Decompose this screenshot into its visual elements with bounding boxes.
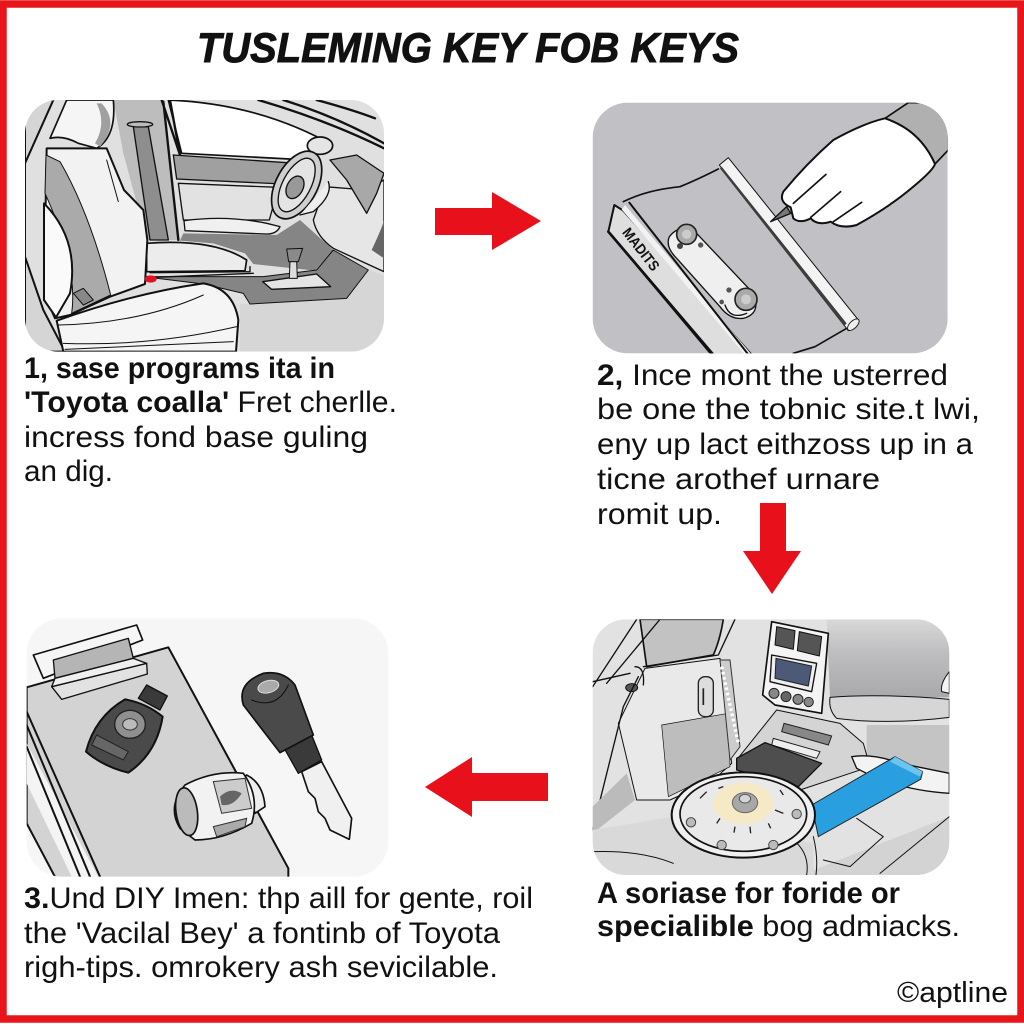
key fob [86, 685, 167, 773]
text: step 3: 3.Und DIY Imen: thp aill for gente, roil [24, 882, 533, 915]
ignition dial [672, 772, 815, 858]
title: TUSLEMING KEY FOB KEYS [197, 24, 739, 71]
door window frame [593, 619, 735, 687]
text: step 2: be one the tobnic site.t lwi, [597, 393, 980, 426]
text: step 4: A soriase for foride or [597, 877, 900, 910]
arrow: step 4 to 3 [425, 757, 548, 817]
window [168, 100, 317, 160]
clip [33, 625, 147, 699]
armrest box [147, 242, 247, 272]
spine text: MADITS [619, 225, 662, 275]
lower right interior [867, 725, 949, 773]
red marker [145, 275, 157, 283]
key plate [668, 224, 757, 319]
headrest [50, 100, 114, 148]
door panel [173, 155, 333, 271]
caption: brand mark: ©aptline [897, 977, 1008, 1009]
sheet edge [623, 169, 847, 353]
text: step 2 [597, 359, 980, 531]
roof lines [258, 100, 384, 148]
center stack [737, 622, 870, 790]
text: step 3 [24, 882, 533, 984]
panel: dashboard with ignition and blue tool [593, 619, 949, 875]
clipboard [27, 647, 288, 880]
lower floor [593, 817, 813, 875]
upper dashboard [827, 619, 949, 697]
steering wheel [270, 136, 334, 220]
center console [143, 250, 368, 304]
blue tool [812, 756, 949, 837]
sleeve [885, 103, 948, 164]
seat back [44, 148, 147, 318]
dashboard [313, 180, 384, 272]
white bar [719, 158, 861, 332]
text: step 1: an dig. [24, 455, 113, 488]
text: step 1: 1, sase programs ita in [24, 352, 335, 385]
panel: car interior with front seat [25, 100, 384, 352]
text: step 3: righ-tips. omrokery ash sevicilable. [24, 951, 498, 984]
book spine [608, 203, 753, 357]
dark module [737, 743, 822, 787]
text: step 4: specialible bog admiacks. [597, 910, 960, 943]
hand [771, 118, 935, 227]
glove box [830, 696, 949, 721]
text: step 4 [597, 877, 960, 943]
text: step 2: romit up. [597, 498, 722, 531]
arrow: step 1 to 2 [435, 192, 541, 250]
panel: key fobs on clipboard [27, 618, 388, 880]
text: step 2: 2, Ince mont the usterred [597, 359, 948, 392]
text: step 1: 'Toyota coalla' Fret cherlle. [24, 386, 397, 419]
floor [240, 270, 384, 352]
panel: hand with screwdriver on key plate [593, 103, 948, 357]
gear shifter [263, 248, 331, 289]
seat cushion [57, 283, 238, 352]
text: step 2: ticne arothef urnare [597, 463, 880, 496]
left door pillar [25, 100, 65, 352]
car key [242, 673, 352, 839]
text: step 3: the 'Vacilal Bey' a fontinb of Toyota [24, 917, 500, 950]
text: step 1 [24, 352, 397, 488]
text: step 1: incress fond base guling [24, 421, 368, 454]
cylinder canister [173, 773, 265, 840]
door pillar and seat belt [113, 100, 180, 240]
text: step 2: eny up lact eithzoss up in a [597, 428, 973, 461]
door panel [593, 658, 740, 833]
arrow: step 2 to 4 [743, 503, 801, 594]
